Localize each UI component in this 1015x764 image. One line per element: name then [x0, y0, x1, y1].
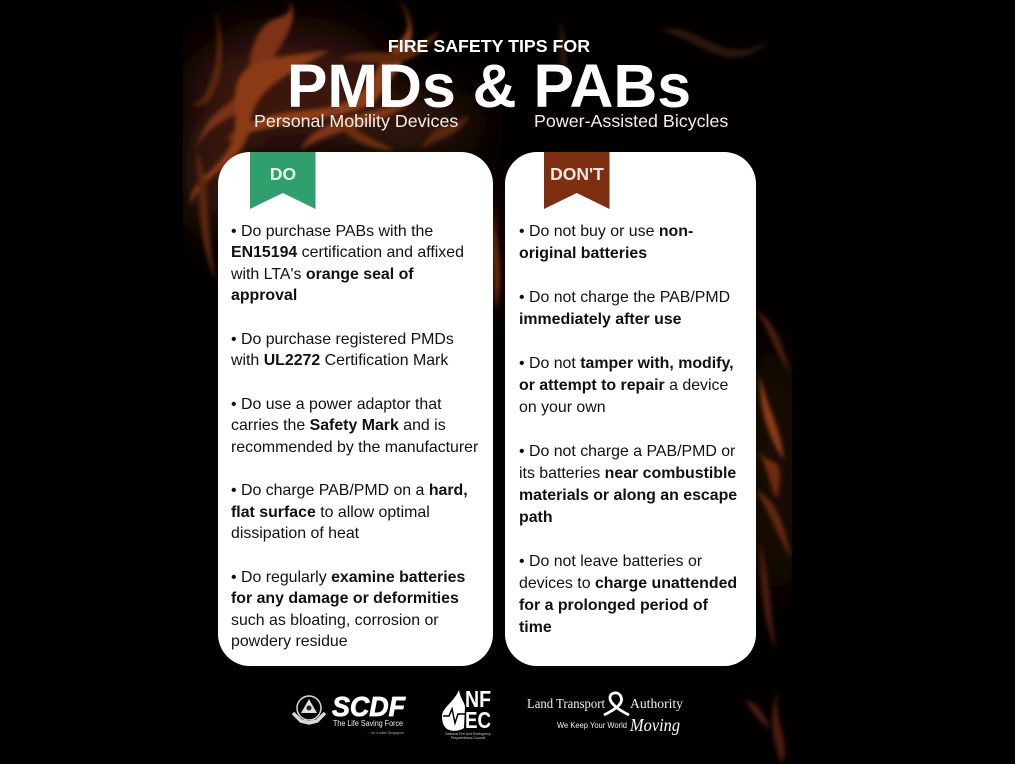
tip: do 3 — [231, 396, 478, 456]
tip: do 4: dissipation of heat — [231, 525, 359, 542]
LTA moving script: Moving — [629, 715, 680, 735]
ribbon: don't — [544, 152, 610, 209]
tip: don't 5: devices to charge unattended — [519, 574, 737, 592]
background: flames — [183, 0, 792, 764]
tip: don't 1: • Do not buy or use non- — [519, 222, 693, 240]
tip: do 5: • Do regularly examine batteries — [231, 568, 465, 586]
logo: NFEC — [442, 686, 491, 740]
tip: don't 3 — [519, 354, 734, 416]
tip: don't 2: • Do not charge the PAB/PMD — [519, 288, 730, 306]
subtitle: personal mobility devices: Personal Mobility Devices — [254, 111, 458, 131]
logo: Land Transport Authority — [527, 692, 683, 735]
tip: do 2: • Do purchase registered PMDs — [231, 330, 454, 348]
LTA name right: Authority — [630, 697, 683, 712]
icon: SCDF crest — [293, 696, 325, 723]
tip: do 2: with UL2272 Certification Mark — [231, 352, 448, 369]
tip: do 1: with LTA's orange seal of — [231, 266, 414, 283]
tip: do 1: approval — [231, 287, 297, 304]
logo: SCDF — [292, 691, 406, 735]
tip: don't 5 — [519, 552, 737, 636]
tip: do 3: carries the Safety Mark and is — [231, 417, 446, 434]
SCDF small line: ... for a safer Singapore — [367, 731, 404, 735]
tip: don't 4 — [519, 442, 737, 526]
tip: don't 4: its batteries near combustible — [519, 464, 736, 482]
tip: do 1 — [231, 222, 464, 304]
tip: don't 4: path — [519, 508, 553, 526]
tip: don't 3: or attempt to repair a device — [519, 376, 728, 394]
tip: don't 5: time — [519, 618, 552, 636]
NFEC caption line 2: Preparedness Council — [451, 736, 485, 740]
tip: do 3: recommended by the manufacturer — [231, 439, 478, 456]
SCDF wordmark: SCDF — [332, 691, 406, 722]
tip: don't 4: • Do not charge a PAB/PMD or — [519, 442, 735, 460]
SCDF tagline: The Life Saving Force — [333, 719, 403, 728]
title: PMDs & PABs: PMDs & PABs — [287, 52, 691, 120]
EC letters: EC — [465, 707, 491, 733]
tip: do 1: • Do purchase PABs with the — [231, 222, 433, 240]
tip: do 1: EN15194 certification and affixed — [231, 244, 464, 261]
LTA name left: Land Transport — [527, 697, 605, 712]
tip: do 5: for any damage or deformities — [231, 590, 459, 607]
tip: do 4: • Do charge PAB/PMD on a hard, — [231, 482, 468, 499]
subtitle: power-assisted bicycles: Power-Assisted Bicycles — [534, 111, 728, 131]
tip: don't 4: materials or along an escape — [519, 486, 737, 504]
NFEC caption: National Fire And Emergency — [445, 732, 491, 736]
tip: do 4 — [231, 482, 468, 542]
tip: don't 2: immediately after use — [519, 310, 682, 328]
tip: do 5: powdery residue — [231, 633, 348, 650]
tip: don't 5: for a prolonged period of — [519, 596, 708, 614]
tip: do 5 — [231, 568, 465, 650]
tip: don't 1: original batteries — [519, 244, 647, 262]
heading: fire safety tips for: FIRE SAFETY TIPS FOR — [388, 36, 590, 56]
tip: do 4: flat surface to allow optimal — [231, 504, 430, 521]
NF letters: NF — [465, 686, 491, 712]
tip: do 2 — [231, 330, 454, 369]
LTA tagline: We Keep Your World — [557, 721, 627, 730]
tip: don't 3: on your own — [519, 398, 606, 416]
tip: don't 3: • Do not tamper with, modify, — [519, 354, 734, 372]
tip: don't 5: • Do not leave batteries or — [519, 552, 702, 570]
tip: don't 1 — [519, 222, 693, 262]
tip: do 5: such as bloating, corrosion or — [231, 612, 439, 629]
tip: don't 2 — [519, 288, 730, 328]
icon: LTA ribbon — [604, 693, 629, 715]
icon: flame drop — [442, 690, 465, 731]
panel: don't — [505, 152, 756, 666]
tip: do 3: • Do use a power adaptor that — [231, 396, 442, 412]
ribbon: do: DO — [270, 164, 296, 184]
ribbon: don't: DON'T — [550, 164, 604, 184]
ribbon: do — [250, 152, 316, 209]
panel: do — [218, 152, 493, 666]
